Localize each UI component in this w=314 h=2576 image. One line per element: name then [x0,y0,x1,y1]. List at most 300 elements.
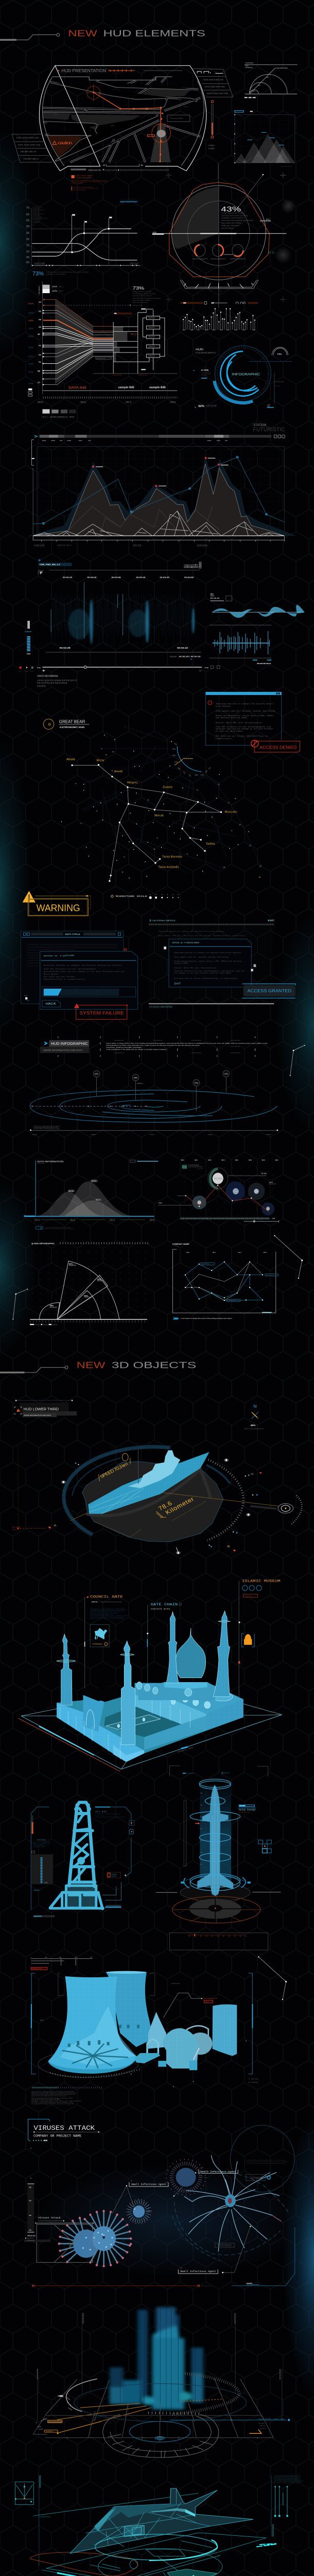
chart: sankey flow: 000.000.000.000 [138,375,148,376]
chart: triangle mountains [234,111,295,167]
chart: star constellation: 50 [208,767,211,770]
object: cooling towers hologram: 200 [59,1957,62,1958]
chart: star constellation: 90 [249,844,252,847]
chart: fan sectors: ◎ HUD INFOGRAPHIC [31,1242,55,1245]
chart: line chart left: 25 [26,238,29,241]
chart: spiral orbit: 0000000 [150,1134,155,1136]
chart: triangle mountains: Lorem ipsum dummy [281,166,292,167]
object: oil rig hologram: Lorem ipsum dummy text [33,1841,51,1843]
object: cooling towers hologram: Y:00722 [248,2078,258,2080]
chart: line chart left: 73% [32,270,44,277]
panel: message console: Search: Open XML spec documentation [216,722,262,724]
panel: audio waveform player: 0:43 [205,667,208,669]
chart: spiral orbit: 15% [134,1077,137,1079]
chart: bubble network: 05% [159,1202,162,1204]
chart: data information mountains: 46.01 [68,1190,74,1192]
vertical slider: Y:0007 [208,145,215,147]
chart: line chart left: Lorem ipsum text dummy printing [32,217,47,219]
chart: fan sectors: 55% [49,1305,54,1307]
chart: spiral orbit: 17% [195,1082,198,1084]
panel: hack console: REPAIR. 40 . P 00 [44,955,65,957]
constellation far right [274,1235,302,1278]
panel: audio waveform player: 00:03:43 [177,647,188,650]
chart: star constellation [61,726,263,881]
compass [245,1404,264,1430]
chart: semicircle gauge: 56% [258,86,260,87]
chart: line chart left: 10 [26,250,29,253]
outer frame: 00 [103,164,105,166]
object: cooling towers hologram: sheets containing Lorem Ipsum passages and more recently [31,2097,73,2099]
constellation right [290,1045,305,1076]
panel: hack console: Word Addin [44,973,58,975]
object: missile hologram: Tactic Concept [238,1808,256,1811]
object: virus and neuron cluster: Viruses Attack [38,2216,61,2219]
panel: message console: ly with our Word Addin [216,730,243,732]
object: mosque hologram: 120/975 mres [151,1608,170,1611]
chart: sankey flow: 00:2 [80,401,86,404]
orange text block: text of the printing and typesetting [73,188,99,190]
chart: 43 percent circle: industry. Lorem Ipsum [221,216,244,219]
chart: bubble network: 70.2% [261,1173,267,1175]
chart: spiral orbit: the 1500s when an unknown printer took a galley [33,1128,60,1129]
chart: star constellation: 21h [172,748,176,750]
chart: sankey flow: DATA [28,355,34,358]
chart: sankey flow: 55534759 [148,355,155,357]
chart: circular infographic: 92% [198,405,204,408]
chart: sankey flow: DATA [28,383,34,384]
panel: coded data right: 0000.0008.0454.005 [205,86,225,88]
panel: message console: View sample code for: densify, ppendj, and vfindj [216,710,275,712]
chart: star constellation: 17h [182,771,186,774]
chart: company network: 0 0 0 0 0 0 0 0 [228,1300,236,1301]
panel: audio waveform player: 0:01 [37,667,41,669]
object: virus and neuron cluster: 0% [29,2200,31,2202]
chart: mountain area chart: 646346 [197,545,207,547]
panel: coded data left: 0000.0008.0454.005 [18,144,40,146]
chart: sankey flow: 48 [38,333,40,335]
chart: circular infographic: 0000 [267,406,270,407]
object: virus and neuron cluster: Somemore... [201,2285,214,2287]
data axis: 3 [40,1227,42,1230]
panel: small waveforms: REJ [211,593,214,595]
caution block [46,135,83,157]
alert: warning [23,891,91,916]
chart: star constellation: Mizar [97,759,104,762]
object: cooling towers hologram: PageMaker including versions of Lorem Ipsum. It is a long established [31,2100,81,2102]
panel: hack console [21,931,138,1009]
chart: spiral orbit: 0000000 [32,1134,38,1136]
ruler with slider [181,1217,279,1223]
chart: 43 percent circle: 43% [221,206,241,213]
object: stealth jet hologram: Ipsum has been the standard dummy text [274,2478,301,2479]
panel: coded data right: 0000.0008.0454.005 [207,93,228,94]
outer frame: 50 [141,164,143,166]
object: virus and neuron cluster: Small Infectious Agent [131,2183,166,2186]
data axis: 00:2 [70,1219,75,1221]
chart: sankey flow: DATA [52,286,58,288]
panel: hack console: 01001010 [27,952,40,954]
chart: circular infographic: 73% [277,353,282,355]
panel: audio waveform player: 00:03:45 [160,576,169,579]
object: missile hologram [156,1766,281,1950]
object: warship hologram: Kilometer [164,1496,195,1516]
object: virus and neuron cluster: Small Infectious Agent [180,2270,216,2273]
chart: star constellation: Megrez [127,782,138,784]
panel: access console: View the structure of your densifywidgets, and generate code via [175,970,245,972]
compass: 45074003654574 [245,1428,264,1430]
title: new hud elements: NEW [68,28,97,38]
title: new hud elements: HUD ELEMENTS [103,28,205,38]
chart: semicircle gauge: 0123 [246,65,249,66]
chart: sankey flow: 55534759 [148,346,155,347]
object: cooling towers hologram: Lorem Ipsum is simply dummy text of the printing and typesetting [31,2091,74,2092]
object: cooling towers hologram: 0000 [206,2001,210,2003]
object: virus and neuron cluster: VIRUSLOAD [27,2235,36,2237]
icon: mosque orange [242,1634,254,1647]
heading: viruses attack: COMPANY OR PROJECT NAME [33,2134,81,2138]
object: stealth jet hologram: printer took a galley of type and scrambled it [274,2481,304,2482]
outer frame [39,65,206,171]
city platform rings: 00000000 [46,2430,53,2432]
panel: access console: View sample code for: densifyjs via our forums, StackOverflow or commercially [158,935,246,937]
object: hologram city [38,2307,289,2422]
chart: line chart left: Lorem ipsum text [32,222,40,223]
chart: star constellation: 18h [177,767,181,770]
chart: sankey flow: ever since the 1500s, [133,299,151,301]
chart: line chart left: 75 [26,207,29,210]
object: cooling towers hologram: fact that a reader will be distracted by the readable content [31,2102,74,2103]
chart: line chart left: Lorem ipsum text [32,211,40,212]
chart: sankey flow: DATA [28,363,34,365]
chart: line chart left: Lorem ipsum text [32,215,40,216]
chart: star constellation: 13h [204,770,208,773]
chart: company network: 0 0 0 0 0 0 0 0 [201,1264,210,1265]
object: oil rig hologram [31,1802,134,1917]
data axis: 00:4 [110,1219,115,1221]
chart: sankey flow: 00:6 [170,401,176,404]
chart: data information mountains: 46.21 [96,1199,100,1201]
panel: access console [149,919,295,1008]
chart: bubble network: 61% [269,1181,273,1183]
data axis: industry. Lorem Ipsum has been the industry standard [45,1228,74,1230]
chart: company network: 00:4 [238,1251,241,1253]
chart: star constellation: Alioth [114,770,123,773]
panel: audio waveform player: VSM_PMD_MN_2.3 [40,563,60,566]
bottom tick bracket [180,280,258,292]
panel: hack console: 01001010 [27,965,40,967]
chart: star constellation: 14h [200,774,204,776]
chart: sankey flow: DATA [28,347,34,349]
heading: great bear [43,719,89,730]
panel: coded data right: 0000.0008.0454.005 [203,79,223,81]
chart: 43 percent circle: 25760 [152,232,157,233]
readout under map [71,168,169,171]
chart: line chart left: Lorem ipsum dummy [32,207,42,208]
object: cooling towers hologram: 00:42 [40,2020,44,2021]
chart: company network: 00:00:00:00 [173,1246,180,1247]
heading: station futuristic [253,423,285,433]
chart: sankey flow: 000.000.000.000 [113,375,122,376]
ruler with slider: 63% [272,1217,275,1219]
chart: sankey flow: DATA [52,290,58,292]
caution block: caution [58,140,72,145]
title: new 3d objects [0,1360,196,1374]
object: virus and neuron cluster: ever since the 1500s when an unknown printer took [247,2163,286,2164]
chart: sankey flow: 000.000.000.000 [97,358,106,359]
object: cooling towers hologram: industry. It has survived not only five centuries but also the leap [31,2092,76,2094]
chart: star constellation: 60 [217,783,220,786]
object: stealth jet hologram: Lorem ipsum is simply dummy text of the [274,2475,300,2477]
orange text block: Lorem ipsum sample [76,175,93,177]
data axis: 00:0 [34,1219,40,1221]
panel: audio waveform player: 00:03:35 [111,576,121,579]
chart: 43 percent circle: dummy text of the printing [221,214,248,216]
object: virus and neuron cluster: 75378568 [218,2244,232,2247]
lower third: hud infographic [40,1037,268,1057]
chart: semicircle gauge [245,62,298,97]
heading: station futuristic: STATION [253,423,267,427]
chart: line chart left: 35 [26,232,29,235]
panel: small waveforms [210,593,304,664]
chart: star constellation: 320 [173,742,178,745]
dome [176,1628,206,1678]
lower third: hud infographic: It was popularised in the 1960s with the release of Letraset sheets containing [106,1048,167,1050]
chart: circular infographic [194,346,292,408]
panel: hack console: View the structure of your densifywidgets [44,968,96,970]
panel: coded data right [193,69,233,97]
panel: audio waveform player: 00:03:50 [184,576,194,579]
chart: sankey flow: 73% [133,285,145,291]
panel: access console: our webapp or for docx-friendly with our Word Addin [175,972,232,974]
chart: sankey flow: 01 [39,361,42,363]
chart: bubble network [158,1160,278,1215]
object: oil rig hologram: printer took [33,1847,44,1849]
object: mosque hologram: ISLAMIC MUSEUM [242,1580,281,1583]
object: oil rig hologram: and typesetting Lorem Ipsum has been [95,1817,125,1818]
object: mosque hologram: 0 0000000000 [245,1596,253,1597]
orange text block: Lorem ipsum dummy [73,189,85,191]
object: mosque hologram: Lorem ipsum is simply dummy text of the printing [90,1608,125,1609]
panel: audio waveform player: Rec [19,671,22,672]
chart: sankey flow: 00:0 [38,401,43,404]
chart: circular infographic: 0000 [267,405,270,406]
chart: sankey flow: DATA 845 [68,386,86,389]
label: small infectious agent top [174,2168,238,2196]
chart: data information mountains: Lorem ipsum [38,1162,44,1164]
object: cooling towers hologram: of a page when looking at its layout, the point of using Lorem [31,2103,74,2105]
compass: 48% [250,1424,256,1427]
panel: audio waveform player: 00:03:40 [136,576,146,579]
object: cooling towers hologram: 00000000000 [203,1997,217,1999]
panel: hud map presentation: 04.5 [184,106,188,108]
chart: line chart left: 45 [26,225,29,228]
object: mosque hologram [18,1580,282,1771]
object: oil rig hologram: [m] [44,1881,47,1884]
orange text block: Lorem ipsum is simply dummy text of the printing and typesetting [72,180,108,181]
chart: sankey flow [28,281,177,418]
panel: audio waveform player: Lorem Ipsum is simply dummy text of [37,679,77,682]
lower third: hud lower third [14,1400,77,1417]
orange route [86,84,171,161]
object: cooling towers hologram: 400 [90,1957,93,1958]
panel: audio waveform player: 00:00:26 / 00:00:43 [179,655,201,658]
panel: hud map presentation [39,65,206,171]
object: missile hologram: 0000 00 00 [223,1773,230,1774]
neuron [184,2155,282,2251]
chart: sankey flow: when an unknown [133,301,148,303]
chart: line chart left: 15 [26,244,29,247]
object: oil rig hologram: printing and typesetting [33,1844,49,1845]
chart: company network: Lorem Ipsum is simply dummy text of the printing industry Lorem Ipsum [181,1317,232,1319]
panel: audio waveform player: 00:03:30 [87,576,97,579]
processing callout: Processing degrees [170,117,184,119]
object: cooling towers hologram: 00000000000 [171,1983,180,1985]
donut trio: AC [ ] [268,251,274,253]
object: oil rig hologram: printing Lorem Ipsum [33,1843,50,1844]
panel: audio waveform player: 0:00849 [25,631,31,633]
chart: sankey flow: 17 [38,381,40,383]
chart: sankey flow: dummy text of the printing [133,293,156,295]
alert: access denied: ACCESS DENIED [259,745,296,750]
chart: sankey flow: sample 845 [149,386,166,389]
map road blocks [43,89,190,162]
panel: hack console: HACK [46,1002,57,1006]
lower third: hud lower third: MORE INFORMATION AND DATA [24,1414,51,1416]
panel: audio waveform player: industry. [37,685,46,687]
alert: access denied [251,740,300,752]
panel: hud map presentation: 07.4 [54,114,58,115]
chart: line chart left: 65 [26,213,29,216]
constellation right [258,1957,286,1999]
chart: bubble network: 02 [182,1165,187,1169]
object: mosque hologram: make a type specimen book. It has survived not only five [90,1615,130,1617]
panel: hack console: Download densify or compare the Densify Enterprise Edition [44,964,122,967]
city platform rings [33,2411,273,2458]
object: cooling towers hologram: with desktop publishing software like Aldus [31,2099,61,2100]
object: mosque hologram: when an unknown printer took a galley [90,1612,119,1614]
orange text block [72,175,108,191]
object: virus and neuron cluster [24,2125,295,2287]
chart: star constellation: 80 [239,823,241,826]
object: missile hologram: Somethin Something [239,1811,250,1813]
panel: audio waveform player: Pause [30,671,34,672]
chart: sankey flow: Lorem ipsum is simply [133,291,152,293]
object: mosque hologram: of type and scrambled it to [90,1614,114,1615]
object: oil rig hologram: when an unknown [33,1846,45,1847]
object: oil rig hologram: OIL RIG [95,1811,107,1813]
object: mosque hologram: and typesetting industry Lorem Ipsum has been the [90,1609,126,1611]
panel: audio waveform player [19,560,220,687]
object: warship hologram [13,1446,302,1554]
lower third: hud infographic: Lorem Ipsum is simply dummy text of the printing and typesetting industry. Lorem Ipsum has been the industry's standard dummy text ever since the 1500s, when an unknown printer took a galley of type [106,1042,268,1044]
chart: spiral orbit: 17% [224,1073,228,1075]
data axis [24,1215,155,1230]
panel: message console: ! [210,702,211,705]
chart: semicircle gauge: Lorem ipsum [246,62,253,64]
constellation left [13,1289,27,1319]
object: mosque hologram: DATA: [92,1601,99,1603]
object: oil rig hologram: printing [95,1815,103,1817]
chart: sankey flow: DATA [28,303,34,305]
chart: star constellation: Muscida [225,811,237,814]
panel: hack console: 01001010 [27,962,40,964]
chart: star constellation: Tania Australis [158,866,179,869]
panel: coded data left: 045.884.7851.0 [24,158,39,160]
panel: access console: Get help via our forums, StackOverflow, or commercially [175,977,237,979]
orange text block: printer took a galley [72,182,83,184]
chart: bubble network: 12% [234,1191,238,1193]
object: oil rig hologram: 0000000 [33,1890,40,1891]
chart: sankey flow: 22 [39,353,42,356]
object: cooling towers hologram: X:99347 [248,2081,258,2084]
chart: line chart left: Lorem ipsum dummy text [32,213,44,215]
chart: star constellation: 20h [172,755,176,756]
chart: star constellation: 100 [258,865,263,868]
panel: hack console: 0100101011101001010111010010101110100101011101001010111010010101110100101 [27,944,117,946]
compass: N [253,1404,256,1409]
chart: mountain area chart: 646346 [34,545,45,547]
header [59,69,182,73]
chart: sankey flow: AC [ ] [131,333,137,335]
object: mosque hologram: 00000000000000 [101,1602,123,1603]
object: hologram city: 0000.0006..0454.005 [258,2418,285,2420]
chart: circular infographic: Lorem ipsum [201,375,207,376]
vertical slider: X:0007 [208,148,215,150]
panel: hack console: Get help via our forums, [44,976,76,977]
heading: great bear: GREAT BEAR [59,719,85,724]
heading: viruses attack: VIRUSES ATTACK [33,2125,95,2132]
alert: warning: WARNING [37,903,80,913]
chart: bubble network: 61% [254,1191,258,1193]
chart: spiral orbit: JOMIMAC... [136,1083,144,1084]
object: virus and neuron cluster: 00000000000 [27,2238,34,2239]
object: virus and neuron cluster: 0% [29,2187,31,2189]
panel: access console: REPAIR. 40 . P 000DOCOBEE [172,942,200,944]
chart: circular infographic: 0 73% [201,369,209,371]
label: small infectious agent top: Small Infectious Agent [200,2171,236,2174]
chart: circular infographic: PLACEHOLDER 01 [196,351,216,354]
panel: small waveforms: SKI_RN_631 [211,597,220,599]
panel: hack console: EDIT CYPLE [65,933,80,935]
legend: magnitude scale: MAGNITUDE SCALE [116,895,147,898]
data axis: 00:6 [150,1219,155,1221]
chip row [180,301,258,304]
object: stealth jet hologram: printing and typesetting industry Lorem [274,2477,300,2478]
donut trio: 5834575685674 [193,258,207,260]
object: stealth jet hologram: ever since the 1500s when an unknown [274,2479,300,2481]
chart: line chart left: 646346 [34,263,45,265]
chart: line chart left: 55 [26,219,29,222]
object: warship hologram: S [251,1473,255,1476]
panel: audio waveform player: 00:03:28 [60,647,71,650]
progress strip [34,435,285,440]
camel card: COORDINATES [92,1643,103,1645]
chart: sankey flow: DATA [28,335,34,337]
chart: sankey flow: DATA [28,312,34,314]
lower third: hud infographic: MORE INFORMATION AND DATA [43,1049,83,1052]
chart: sankey flow: DATA [28,328,34,330]
chart: semicircle gauge: 56% [253,91,255,92]
panel: access console: ACCESS GRANTED [248,989,291,993]
chart: company network: 00:0 [186,1251,189,1253]
object: stealth jet hologram: to make a type specimen book [274,2482,300,2483]
chart: star constellation: Dubhe [163,786,172,789]
heading: great bear: ASTRONOMY HUD [60,726,85,728]
panel: message console: and Getting Started [PDF] [216,717,248,719]
chart: spiral orbit [30,1071,277,1136]
object: warship hologram: SPEED 70.3 km [99,1461,129,1479]
chart: company network: 00:6 [264,1251,267,1253]
